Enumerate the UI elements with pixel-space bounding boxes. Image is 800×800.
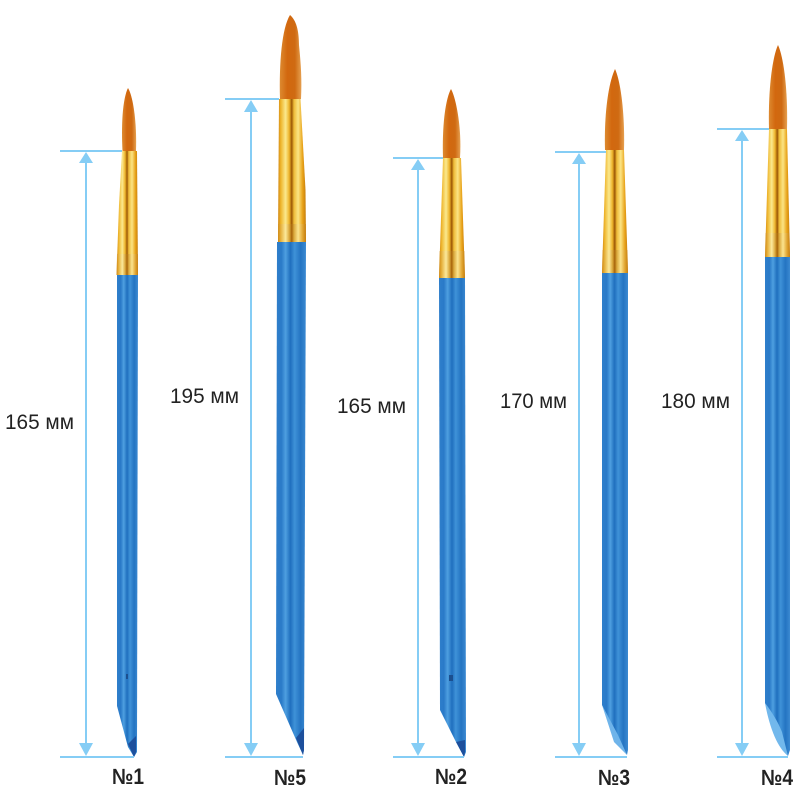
label: no.2: №2 xyxy=(435,764,467,789)
brush no.1 xyxy=(116,88,138,757)
bristles xyxy=(443,89,460,158)
dimension: 165 mm no.2 xyxy=(393,158,464,757)
brush no.2 xyxy=(439,89,466,757)
handle mark xyxy=(126,674,128,679)
bevel tip xyxy=(602,705,627,755)
ferrule band xyxy=(765,233,790,257)
bevel tip xyxy=(456,740,465,757)
brush no.5 xyxy=(276,15,306,755)
brush no.3 xyxy=(602,69,628,755)
bevel tip xyxy=(128,736,136,757)
ferrule xyxy=(278,99,306,242)
label: 165 mm: 165 мм xyxy=(5,411,74,434)
ferrule band xyxy=(278,224,306,242)
dimension: 170 mm no.3 xyxy=(555,152,627,757)
bristles xyxy=(605,69,624,150)
bevel tip xyxy=(296,728,304,755)
label: no.3: №3 xyxy=(598,765,630,790)
handle xyxy=(765,257,790,756)
label: 165 mm: 165 мм xyxy=(337,395,406,418)
bristles xyxy=(769,45,787,129)
dimension: 165 mm no.1 xyxy=(60,151,134,757)
handle xyxy=(276,242,306,755)
dimension: 195 mm no.5 xyxy=(225,99,303,757)
brush no.4 xyxy=(765,45,790,756)
handle xyxy=(602,273,628,755)
bristles xyxy=(122,88,136,151)
handle mark xyxy=(449,675,453,681)
bristles xyxy=(280,15,301,99)
bevel tip xyxy=(765,703,788,756)
dimension: 180 mm no.4 xyxy=(717,129,788,757)
handle xyxy=(117,275,138,757)
ferrule band xyxy=(116,254,138,275)
label: 195 mm: 195 мм xyxy=(170,385,239,408)
label: no.4: №4 xyxy=(761,765,794,790)
ferrule xyxy=(439,158,465,278)
label: no.1: №1 xyxy=(112,764,144,789)
ferrule xyxy=(765,129,790,257)
handle xyxy=(439,278,466,757)
ferrule band xyxy=(439,251,465,278)
ferrule xyxy=(602,150,628,273)
label: no.5: №5 xyxy=(274,765,306,790)
ferrule xyxy=(116,151,138,275)
ferrule band xyxy=(602,250,628,273)
label: 170 mm: 170 мм xyxy=(500,390,567,413)
label: 180 mm: 180 мм xyxy=(661,390,730,413)
